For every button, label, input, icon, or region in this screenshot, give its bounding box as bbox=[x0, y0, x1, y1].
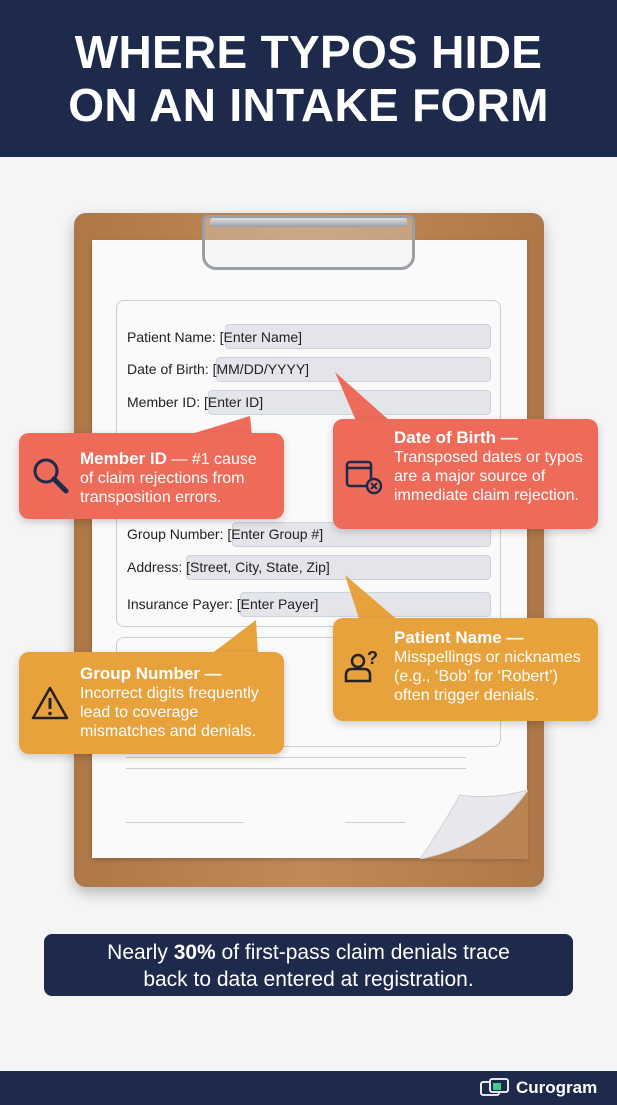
page curl bbox=[420, 790, 528, 859]
icon: person question bbox=[344, 648, 378, 682]
clip bbox=[202, 215, 415, 270]
form bbox=[116, 300, 501, 627]
text: Member ID: [Enter ID] bbox=[127, 394, 263, 410]
callout: member id: Member ID — #1 cause of claim rejections from transposition errors. bbox=[80, 449, 257, 506]
callout: member id bbox=[19, 433, 284, 519]
header: ON AN INTAKE FORM bbox=[68, 79, 549, 131]
callout: date of birth bbox=[333, 419, 598, 529]
stat box: Nearly 30% of first-pass claim denials trace bbox=[107, 941, 510, 964]
text: Address: [Street, City, State, Zip] bbox=[127, 559, 330, 575]
stat box: back to data entered at registration. bbox=[143, 968, 474, 991]
callout: group number: Incorrect digits frequently lead to coverage mismatches and denials. bbox=[80, 685, 259, 740]
header bbox=[0, 0, 617, 157]
callout: patient name: Misspellings or nicknames (e.g., ‘Bob’ for ‘Robert’) often trigger denials. bbox=[394, 649, 581, 704]
clipboard bbox=[74, 213, 544, 887]
text: Group Number: [Enter Group #] bbox=[127, 526, 323, 542]
icon: magnifier bbox=[34, 458, 68, 494]
callout: group number bbox=[19, 652, 284, 754]
icon: warning bbox=[32, 686, 68, 720]
callout: group number: Group Number — bbox=[80, 664, 222, 683]
paper bbox=[92, 240, 527, 858]
footer bbox=[0, 1071, 617, 1105]
header: WHERE TYPOS HIDE bbox=[75, 26, 542, 78]
text: Insurance Payer: [Enter Payer] bbox=[127, 596, 318, 612]
text: Date of Birth: [MM/DD/YYYY] bbox=[127, 361, 309, 377]
logo: Curogram bbox=[516, 1078, 597, 1097]
callout: patient name bbox=[333, 618, 598, 721]
callout: date of birth: Transposed dates or typos are a major source of immediate claim rejection. bbox=[394, 449, 583, 504]
callout: patient name: Patient Name — bbox=[394, 628, 523, 647]
text: Patient Name: [Enter Name] bbox=[127, 329, 302, 345]
icon: person question: ? bbox=[367, 648, 378, 668]
callout: date of birth: Date of Birth — bbox=[394, 428, 518, 447]
icon: calendar x bbox=[346, 460, 382, 494]
logo bbox=[480, 1078, 597, 1097]
stat box bbox=[44, 934, 573, 996]
